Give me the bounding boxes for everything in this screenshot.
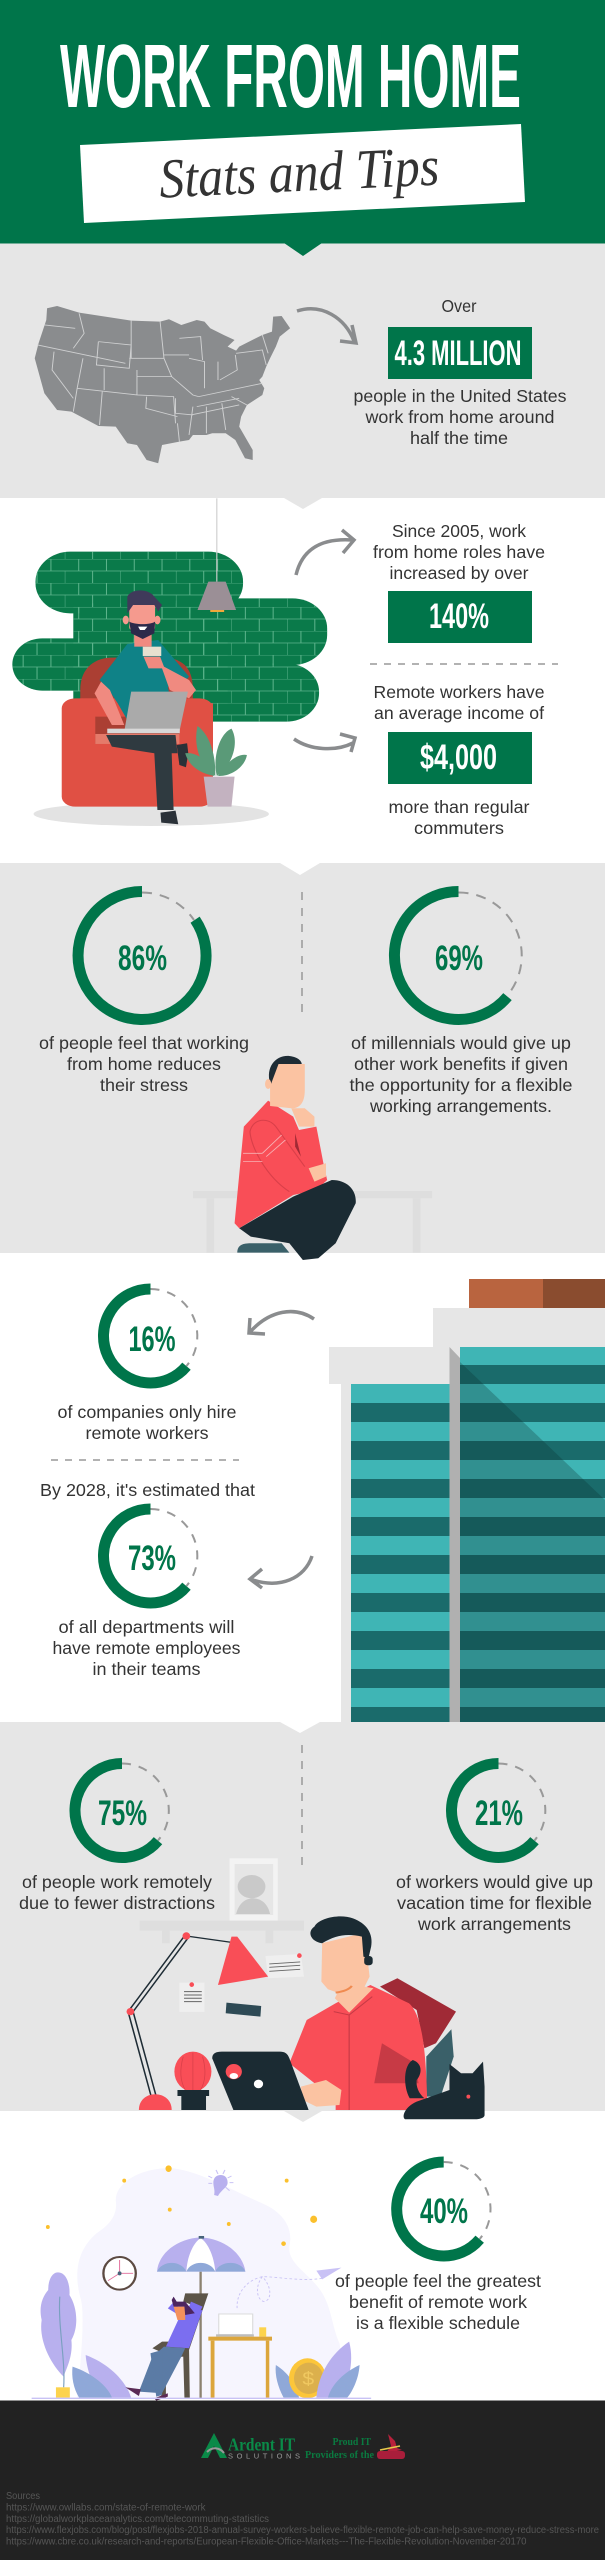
illustration: man at desk with laptop and cat [127,1858,485,2119]
text block: vacation: work arrangements [417,1914,571,1934]
background blob [77,2168,347,2398]
text block: millennials [350,1033,572,1116]
text block: millennials: other work benefits if given [354,1054,568,1074]
text block: more than regular commuters [388,797,530,838]
text block: companies [58,1402,236,1443]
text block: vacation [396,1872,593,1934]
subtitle banner: Stats and Tips [158,135,440,211]
logo: Proud IT Providers of the Cardinals: Proud IT [332,2436,372,2448]
text block: flexible schedule: is a flexible schedule [356,2313,520,2333]
panel: footer [0,2400,605,2560]
text block: sources: https://www.owllabs.com/state-of-remote-work [6,2502,206,2514]
arrow: to 73% [250,1556,312,1588]
text block: departments [52,1617,241,1679]
text block: distractions [19,1872,215,1913]
stat box: 4.3 million [388,327,532,379]
left plant [41,2272,76,2398]
desk lamp [127,1932,268,2110]
panel: income and growth stats [12,498,558,838]
decorative dots [46,2165,317,2246]
relaxing man in chair [125,2293,208,2401]
text block: stress: of people feel that working [39,1033,249,1053]
text block: vacation: of workers would give up [396,1872,593,1892]
stat box: 140% [388,591,532,643]
text block: companies: of companies only hire [58,1402,236,1422]
text block: more than regular commuters: more than regular [388,797,530,817]
text block: distractions: due to fewer distractions [19,1893,215,1913]
text block: millennials: of millennials would give up [351,1033,571,1053]
black cat [404,2060,485,2119]
stat box: $4,000 [388,732,532,784]
text block: departments: in their teams [92,1659,201,1679]
donut chart: 21% [451,1764,545,1858]
panel: remote hiring [40,1279,605,1722]
text block: people in the United States: work from home around [364,407,554,427]
text block: stress [39,1033,249,1095]
donut chart: 86% [78,892,206,1019]
text block: millennials: the opportunity for a flexible [350,1075,572,1095]
panel: header [0,0,605,256]
text block: flexible schedule [335,2271,541,2333]
text block: remote workers: Remote workers have [374,682,544,702]
text block: people in the United States: half the time [410,428,508,448]
donut chart: 75%: 75% [98,1794,147,1833]
donut chart: 40% [397,2162,491,2256]
donut chart: 69% [394,892,522,1020]
logo: Ardent IT Solutions [201,2433,300,2460]
illustration: office building [329,1279,605,1722]
illustration: man on armchair with laptop [12,498,327,826]
text block: remote workers: an average income of [374,703,544,723]
light bulb [208,2170,233,2196]
umbrella [157,2236,245,2398]
donut chart: 16%: 16% [128,1320,176,1359]
text block: stress: from home reduces [67,1054,221,1074]
man [95,590,196,824]
donut chart: 73% [103,1509,197,1603]
text block: people in the United States: people in the United States [354,386,567,406]
cactus [174,2052,211,2110]
text block: vacation: vacation time for flexible [397,1893,592,1913]
donut chart: 75% [75,1764,169,1858]
man [289,1916,427,2110]
text block: since 2005 [373,521,545,583]
text block: stress: their stress [100,1075,188,1095]
shelf with picture frame [140,1858,304,1943]
arrow: down [294,734,355,752]
text block: sources: Sources [6,2491,40,2502]
text block: remote workers [374,682,544,723]
panel: flexible schedule [32,2162,541,2401]
donut chart: 16% [103,1289,197,1383]
text block: distractions: of people work remotely [22,1872,212,1892]
wall clock [103,2257,136,2290]
illustration: relaxing man under umbrella [32,2165,371,2401]
illustration: thinking man on bench [193,1056,432,1260]
logo: Proud IT Providers of the Cardinals: Providers of the [305,2449,374,2461]
text block: over: Over [442,296,477,316]
donut chart: 86%: 86% [118,939,167,978]
donut chart: 40%: 40% [420,2192,468,2231]
coin and leaves: $ [302,2369,314,2390]
donut chart: 21%: 21% [475,1794,523,1833]
text block: millennials: working arrangements. [369,1096,552,1116]
stat box: 4.3 million: 4.3 MILLION [394,334,522,373]
text block: departments: have remote employees [52,1638,241,1658]
arrow: to 16% [249,1312,314,1334]
chair [380,1978,456,2097]
wall notes [179,1953,304,2017]
text block: flexible schedule: benefit of remote work [349,2292,527,2312]
desk with laptop [208,2314,272,2398]
text block: sources [6,2491,599,2548]
armchair [62,658,213,807]
text block: more than regular commuters: commuters [414,818,504,838]
stat box: $4,000: $4,000 [420,738,497,777]
potted plant [185,726,247,807]
leaves [72,2355,131,2398]
hanging lamp [198,498,236,612]
logo: Ardent IT Solutions: Ardent IT [228,2434,295,2454]
coin and leaves [276,2342,360,2398]
panel: distractions and vacation [19,1745,593,2119]
text block: departments: of all departments will [58,1617,234,1637]
map of the United States [35,306,290,463]
laptop [212,2052,309,2110]
text block: flexible schedule: of people feel the greatest [335,2271,541,2291]
arrow: up [296,530,354,575]
subtitle banner [80,124,525,223]
text block: companies: remote workers [86,1423,209,1443]
paper plane [237,2268,341,2310]
panel: United States stat [35,296,567,463]
text block: since 2005: from home roles have [373,542,545,562]
panel: stress and benefits [39,892,572,1116]
logo: Proud IT Providers of the Cardinals [305,2434,405,2461]
text block: people in the United States [354,386,567,448]
floor shadow [34,802,269,826]
text block: by 2028: By 2028, it's estimated that [40,1480,255,1500]
text block: sources: https://www.cbre.co.uk/research-and-reports/European-Flexible-Office-Markets---The-Flexible-Revolution-November-20170 [6,2536,527,2548]
arrow [297,309,356,343]
text block: since 2005: increased by over [390,563,529,583]
donut chart: 73%: 73% [128,1539,176,1578]
brick wall [12,552,327,722]
donut chart: 69%: 69% [435,939,483,978]
text block: sources: https://globalworkplaceanalytics.com/telecommuting-statistics [6,2514,269,2525]
logo: Ardent IT Solutions: SOLUTIONS [228,2452,300,2460]
text block: since 2005: Since 2005, work [392,521,526,541]
stat box: 140%: 140% [429,597,489,636]
